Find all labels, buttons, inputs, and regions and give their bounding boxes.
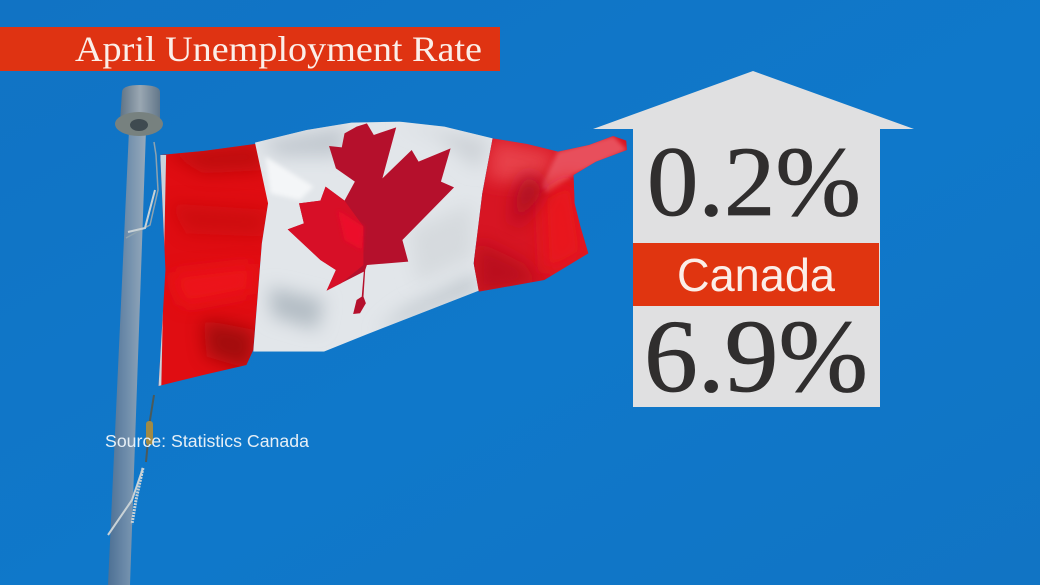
flagpole [108, 85, 163, 585]
up arrow panel [593, 71, 914, 414]
title: April Unemployment Rate [75, 29, 482, 69]
rope clasp [146, 421, 153, 445]
source note: Source: Statistics Canada [105, 431, 309, 451]
value: rate 6.9%: 6.9% [644, 299, 868, 414]
flag: left red band [155, 140, 272, 390]
flag: maple leaf [288, 123, 454, 314]
icon: pole cap [115, 85, 163, 136]
value: change 0.2%: 0.2% [647, 126, 861, 237]
flag: white band [248, 117, 500, 357]
Canada label bar: Canada [677, 249, 835, 301]
title banner [0, 27, 500, 71]
Canadian flag [155, 117, 634, 390]
Canada label bar [633, 243, 879, 306]
halyard ropes [108, 142, 158, 535]
flag: right red band [474, 136, 627, 292]
